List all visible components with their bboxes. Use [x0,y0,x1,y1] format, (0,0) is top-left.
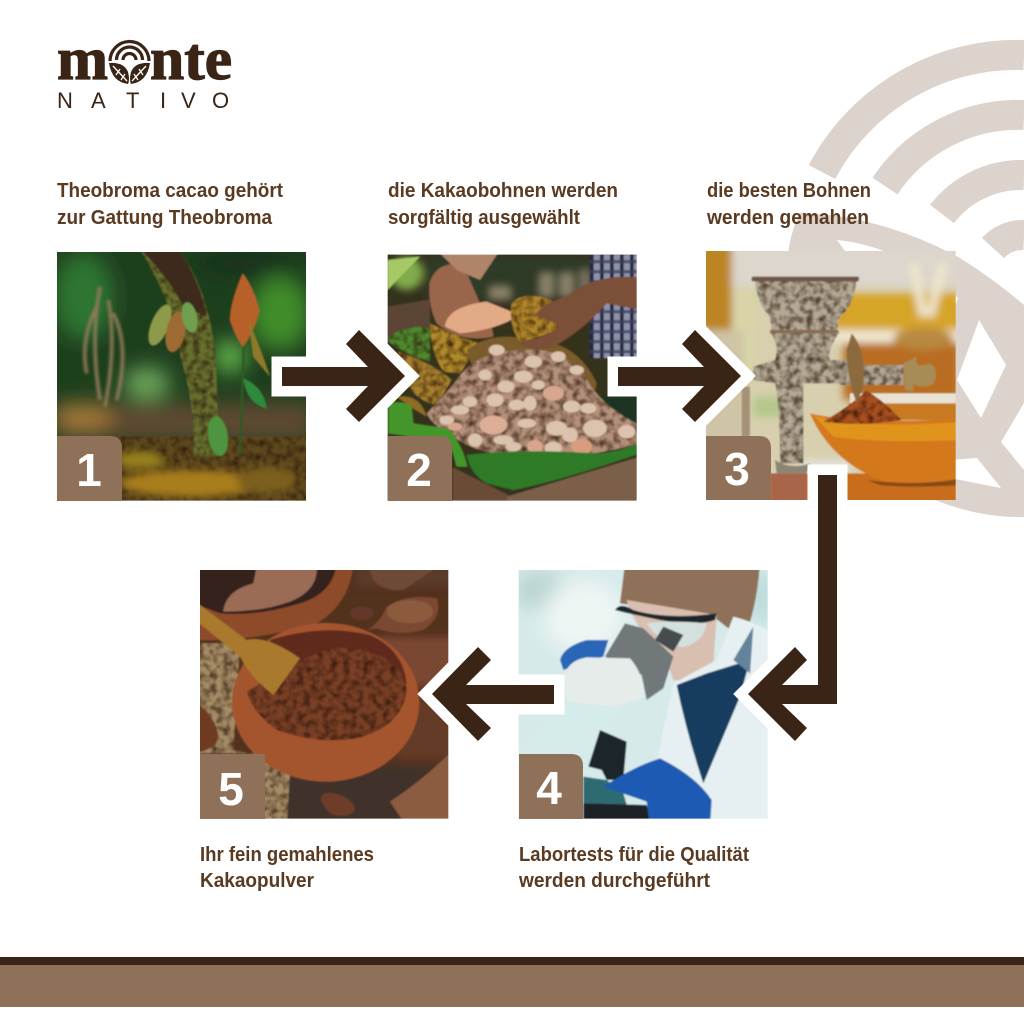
photo 3: grinder with cocoa in bowl [706,251,956,500]
caption step 1: zur Gattung Theobroma [57,207,273,229]
logo: Monte Nativo [57,26,232,113]
badge 1: 1 [76,444,102,496]
caption step 4: Labortests für die Qualität [519,844,749,866]
badge 2: 2 [406,444,432,496]
photo 5: cocoa powder in bowl [200,570,448,819]
badge 4 [519,754,583,819]
arrow 1 to 2 [282,330,405,422]
badge 5: 5 [218,763,244,815]
caption step 1 [57,180,283,229]
caption step 3: werden gemahlen [706,207,869,229]
caption step 2 [388,180,618,229]
badge 5 [200,754,265,819]
arrow 4 to 5 [432,647,554,741]
badge 4: 4 [536,762,562,814]
badge 1 [57,436,122,501]
caption step 4 [518,844,749,892]
logo: Monte Nativo: m [57,26,108,92]
logo: Monte Nativo: NATIVO [57,88,229,113]
badge 3 [706,436,771,500]
caption step 1: Theobroma cacao gehört [57,180,283,202]
logo: Monte Nativo: nte [150,26,232,92]
badge 2 [388,436,452,501]
caption step 2: die Kakaobohnen werden [388,180,618,202]
background watermark: logo emblem [787,55,1024,517]
caption step 3: die besten Bohnen [707,180,871,202]
photo 4: lab test with microscope [518,570,768,819]
caption step 2: sorgfältig ausgewählt [388,207,580,229]
caption step 5: Kakaopulver [200,870,314,892]
caption step 5: Ihr fein gemahlenes [200,844,374,866]
arrow 3 to 4 [748,475,837,741]
caption step 3 [706,180,871,229]
arrow 2 to 3 [618,330,741,422]
badge 3: 3 [724,443,750,495]
footer band [0,957,1024,1007]
caption step 4: werden durchgeführt [518,870,710,892]
photo 1: cacao tree [50,247,313,507]
photo 2: selecting cacao beans [388,254,637,501]
caption step 5 [200,844,374,892]
